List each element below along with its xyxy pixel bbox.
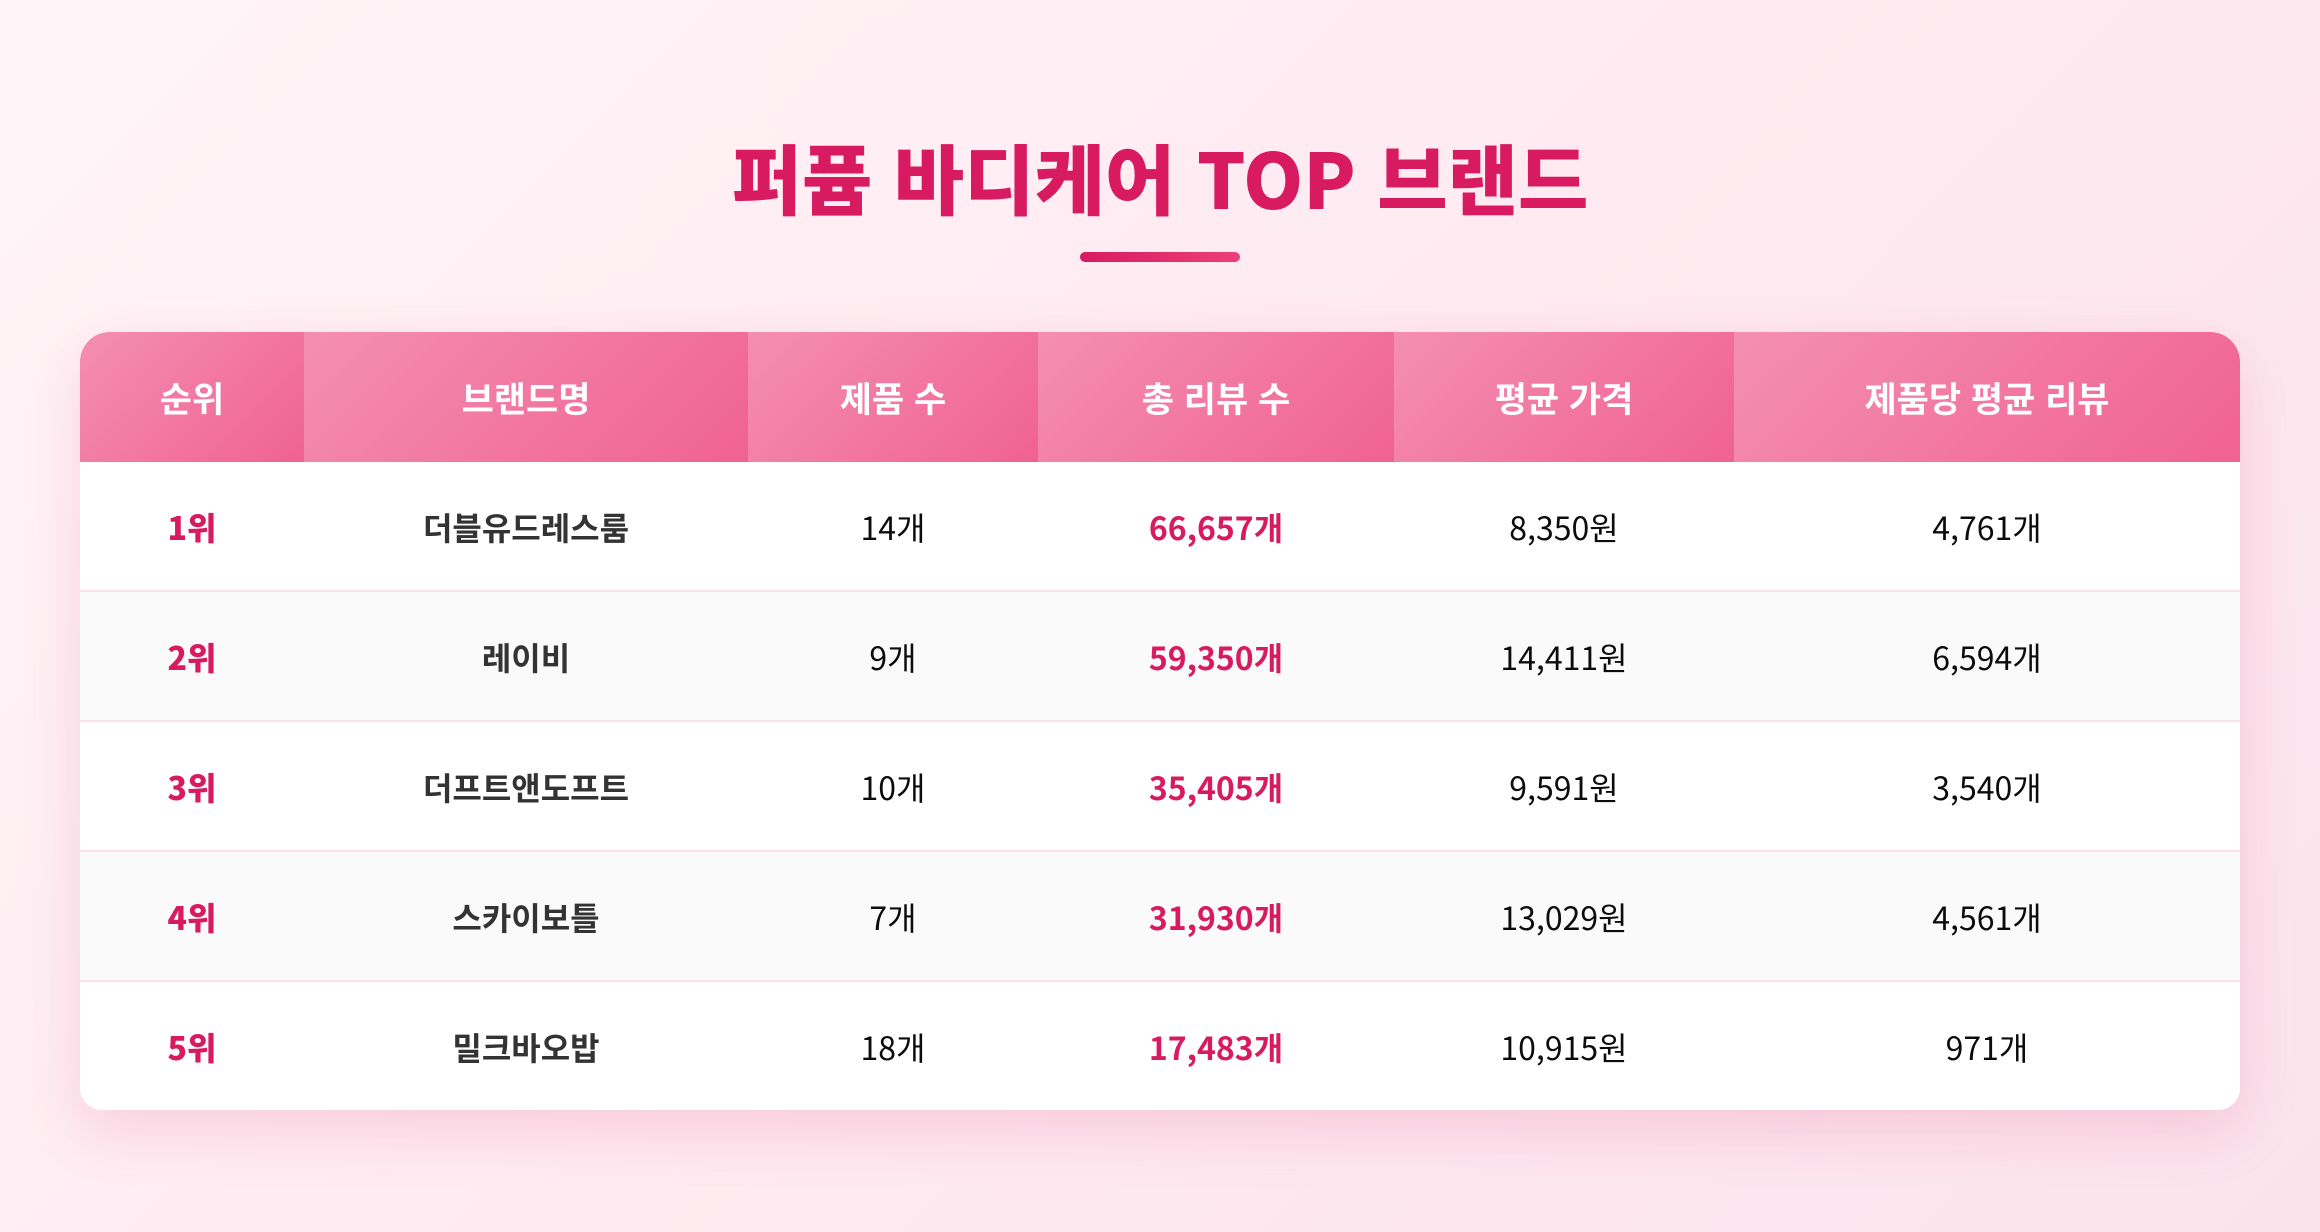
row: rank 2: 14,411원 xyxy=(1500,634,1628,680)
row: rank 4: 4위 xyxy=(168,894,216,940)
table header row: 제품 수 xyxy=(840,372,946,422)
row: rank 4: 7개 xyxy=(869,894,917,940)
table header row: 제품당 평균 리뷰 xyxy=(1864,372,2110,422)
title: 퍼퓸 바디케어 TOP 브랜드 xyxy=(732,121,1588,232)
row: rank 4: 13,029원 xyxy=(1500,894,1628,940)
row: rank 2: 레이비 xyxy=(482,634,570,680)
row: rank 4: 4,561개 xyxy=(1932,894,2042,940)
table header row: 순위 xyxy=(160,372,224,422)
table header row xyxy=(80,332,2240,462)
row: rank 4: 스카이보틀 xyxy=(452,894,600,940)
row: rank 5: 971개 xyxy=(1946,1024,2028,1070)
table header row: 총 리뷰 수 xyxy=(1142,372,1290,422)
row: rank 1 xyxy=(80,462,2240,592)
row: rank 2: 2위 xyxy=(168,634,216,680)
row: rank 3: 35,405개 xyxy=(1149,764,1283,810)
row: rank 1: 1위 xyxy=(168,504,216,550)
row: rank 3: 10개 xyxy=(861,764,925,810)
row: rank 4: 31,930개 xyxy=(1149,894,1283,940)
row: rank 1: 더블유드레스룸 xyxy=(423,504,629,550)
row: rank 4 xyxy=(80,852,2240,982)
row: rank 2: 6,594개 xyxy=(1932,634,2042,680)
row: rank 1: 4,761개 xyxy=(1932,504,2042,550)
row: rank 2: 9개 xyxy=(869,634,917,680)
row: rank 5: 10,915원 xyxy=(1500,1024,1628,1070)
row: rank 5: 5위 xyxy=(168,1024,216,1070)
table: top brands xyxy=(80,332,2240,1110)
row: rank 5: 17,483개 xyxy=(1149,1024,1283,1070)
row: rank 5 xyxy=(168,1024,2028,1070)
row: rank 5: 18개 xyxy=(861,1024,925,1070)
row: rank 1: 14개 xyxy=(861,504,925,550)
row: rank 1: 66,657개 xyxy=(1149,504,1283,550)
table header row: 평균 가격 xyxy=(1495,372,1633,422)
row: rank 3: 3,540개 xyxy=(1932,764,2042,810)
row: rank 2: 59,350개 xyxy=(1149,634,1283,680)
table header row: 브랜드명 xyxy=(462,372,590,422)
row: rank 5: 밀크바오밥 xyxy=(452,1024,600,1070)
row: rank 1: 8,350원 xyxy=(1509,504,1619,550)
row: rank 3: 3위 xyxy=(168,764,216,810)
row: rank 3: 9,591원 xyxy=(1509,764,1619,810)
row: rank 2 xyxy=(80,592,2240,722)
title underline xyxy=(1080,252,1240,262)
row: rank 3: 더프트앤도프트 xyxy=(423,764,629,810)
row: rank 3 xyxy=(80,722,2240,852)
